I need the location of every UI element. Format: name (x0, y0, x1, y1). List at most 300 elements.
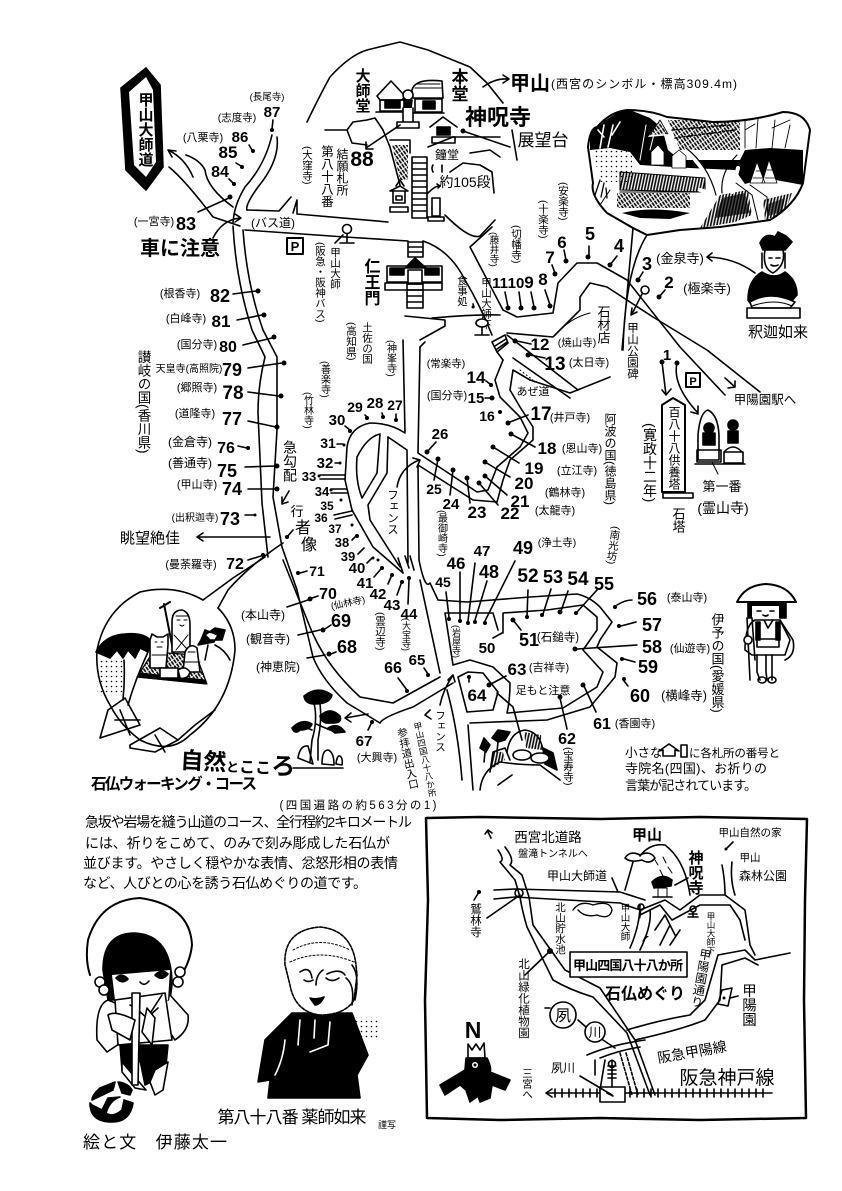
label 甲陽園駅へ: 甲陽園駅へ (734, 393, 796, 407)
stop 88: 第八十八番 (319, 144, 333, 208)
stop 26 (424, 426, 448, 454)
staff (132, 993, 140, 1085)
stop 61: (香園寺) (615, 717, 655, 730)
robe (748, 272, 797, 303)
robe (258, 1013, 368, 1098)
label 甲山公園碑: 甲山公園碑 (626, 322, 639, 380)
stop 6: (安楽寺) (557, 182, 569, 220)
inset map: 夙川 (551, 1061, 575, 1075)
label 第一番 霊山寺: (霊山寺) (697, 500, 749, 516)
stop 72: (曼荼羅寺) (165, 558, 217, 571)
stop 21: (鶴林寺) (545, 485, 585, 499)
label 約105段 (428, 174, 491, 193)
stop 2 (656, 273, 731, 300)
label フェンス with arrow: フェンス (386, 489, 398, 535)
pilgrim character (87, 898, 192, 1095)
label 石塔: 石塔 (670, 507, 686, 533)
statues: 第一番 (695, 410, 745, 474)
stop 63 (486, 660, 569, 688)
stop 74 (177, 478, 280, 499)
stop 27 (387, 397, 403, 422)
stop 80 (177, 334, 276, 356)
stop 76 (168, 435, 250, 457)
label: 釈迦如来 (748, 324, 808, 341)
stop 21 (482, 474, 585, 511)
stop 48 (473, 562, 499, 624)
stop 33: 33 (302, 469, 316, 484)
region label 土佐の国: (高知県) (345, 322, 357, 360)
stop 55: 55 (594, 574, 614, 594)
region label 伊予の国: 伊予の国(愛媛県) (710, 613, 724, 713)
north arrow crow (440, 1017, 510, 1102)
stop 59 (620, 657, 658, 677)
stop 26: 26 (432, 426, 448, 443)
stone stairs (412, 157, 427, 218)
stop 29 (347, 399, 369, 420)
label 最御崎寺: (最御崎寺) (436, 510, 448, 557)
label 眺望絶佳: 眺望絶佳 (120, 530, 180, 547)
stop 2: 2 (664, 273, 674, 292)
stop 75: 75 (217, 461, 237, 481)
label 甲山大師 bus stop and 阪急阪神バス (314, 224, 354, 322)
label 行者像 (285, 504, 317, 554)
building: 仁王門: 仁王門 (362, 258, 380, 306)
stop 18: 18 (538, 439, 556, 458)
stop 83: (一宮寺) (134, 215, 174, 228)
stop 19 (490, 444, 597, 478)
inset map: 北山緑化植物園 (517, 958, 530, 1039)
stop 3: (金泉寺) (656, 251, 704, 266)
label 甲山: 甲山 (510, 72, 550, 95)
title: 自然 (180, 747, 227, 775)
stop 58 (572, 637, 710, 657)
head (285, 927, 357, 1015)
Shaka Nyorai statue (707, 232, 808, 341)
arrow to 金泉寺 (707, 253, 755, 273)
stop 3 (636, 251, 704, 282)
stop 17 (506, 404, 590, 426)
stele (428, 198, 444, 221)
stop 31 (320, 435, 346, 451)
stop 66: 66 (384, 660, 402, 677)
stop 23: 23 (468, 503, 486, 522)
stop 32 (317, 455, 342, 472)
stop 10: (切幡寺) (510, 225, 522, 264)
stop 75 (168, 455, 280, 481)
stop 39: 39 (341, 549, 355, 564)
stop 69: 69 (331, 611, 351, 631)
inset map: 甲陽園通り (689, 947, 713, 1009)
building: 大師堂 (354, 67, 406, 113)
stop 20 (482, 460, 533, 493)
stop 68: 68 (337, 637, 357, 657)
stop 50 (479, 633, 502, 657)
stop 80: 80 (219, 339, 237, 356)
stop 57: 57 (642, 615, 662, 635)
stop 60: 60 (630, 686, 650, 706)
label フェンス with arrow (386, 458, 420, 535)
stop 6: 6 (557, 233, 567, 252)
label 石材店 (555, 305, 610, 344)
stop 12 (512, 335, 596, 354)
label 甲陽園駅へ (725, 378, 796, 407)
stop 68 (256, 637, 357, 674)
stop 54 (558, 569, 589, 614)
stop 27: 27 (387, 397, 403, 413)
stop 82: 82 (210, 286, 230, 306)
stop 30 (329, 412, 352, 433)
label 行者像: 像 (301, 536, 317, 554)
inset map (425, 817, 807, 1120)
stop 79: 79 (222, 360, 242, 380)
stop 35 (320, 498, 342, 513)
stop 40 (349, 556, 380, 577)
stop 74: (甲山寺) (177, 478, 217, 491)
stop 11: 11 (492, 275, 508, 292)
building: 大師堂: 大師堂 (354, 67, 370, 113)
stop 88: 結願札所 (335, 148, 349, 196)
label 甲山大師下 bus stop: 甲山大師下 (480, 277, 492, 330)
label 行者像: 行 (290, 504, 304, 519)
Stop 1 and stone tower (603, 347, 796, 533)
stop 77 (175, 406, 280, 430)
label 石材店: 石材店 (596, 305, 610, 344)
stop 39 (341, 548, 364, 564)
label 行者像: 者 (295, 519, 311, 537)
stop 37: 37 (328, 522, 342, 536)
stop 40: 40 (349, 560, 365, 577)
Tosa province stops 27 to 40 (302, 321, 420, 623)
stop 53 (540, 567, 563, 617)
stop 6 (557, 182, 569, 264)
stop 76: 76 (217, 440, 235, 457)
stop 87 (250, 92, 284, 132)
stop 9 (524, 273, 536, 310)
stop 63: (吉祥寺) (529, 660, 569, 674)
stop 8 (538, 270, 552, 308)
label 車に注意: 車に注意 (140, 237, 220, 260)
stop 20: 20 (515, 474, 533, 493)
inset map: 甲山 (740, 852, 760, 864)
label 急勾配 (282, 440, 298, 504)
stop 49: 49 (513, 538, 533, 558)
inset map: 鷲林寺 (469, 902, 482, 938)
bell tower: 鐘堂 (430, 117, 517, 162)
stop 61 (580, 682, 655, 733)
stop 49: (浄土寺) (538, 536, 576, 549)
stop 70 (241, 586, 337, 622)
stop 88 (301, 125, 400, 208)
stop 5 (585, 224, 595, 260)
label バス道: (バス道) (251, 216, 295, 230)
stop 74: 74 (222, 479, 242, 499)
stop 61: 61 (593, 716, 611, 733)
stop 46: 46 (447, 554, 465, 573)
publisher logo (90, 1082, 133, 1122)
mountain 甲山 (625, 845, 704, 897)
caption: 第八十八番 薬師如来: 第八十八番 薬師如来 (218, 1108, 366, 1127)
stop 24: 24 (443, 496, 460, 513)
credit: 絵と文 伊藤太一 (83, 1133, 227, 1152)
label 展望台: 展望台 (518, 131, 568, 150)
hat (87, 898, 192, 985)
building: 本堂: 本堂 (448, 68, 468, 102)
inset map: 阪急神戸線 (679, 1067, 775, 1089)
stop 44 (401, 576, 418, 623)
stop 83 (134, 194, 232, 234)
note about small shrines (625, 744, 780, 793)
hair (103, 933, 172, 1000)
stop 52: 52 (517, 566, 539, 587)
stop 17: (井戸寺) (550, 410, 590, 424)
stop 51 (510, 618, 579, 650)
label 神呪寺: 神呪寺 (465, 105, 531, 130)
stop 68: (神恵院) (256, 659, 300, 674)
stop 15 (427, 389, 494, 407)
stop 13: 13 (544, 354, 566, 375)
stop 67 (345, 713, 397, 764)
stop 66 (384, 660, 409, 693)
subtitle: 四国遍路の約563分の1: (四国遍路の約563分の1) (280, 798, 437, 812)
stops 72 to 87 left side (120, 92, 317, 573)
stop 10: 10 (508, 275, 524, 292)
mountain outline (307, 42, 503, 122)
boulder illustration (480, 730, 560, 790)
pilgrim figure (737, 584, 796, 683)
railway (546, 1053, 772, 1102)
stop 45 (435, 574, 451, 621)
stop 13: (太日寺) (569, 356, 609, 369)
stop 77: 77 (222, 409, 242, 429)
label 急勾配: 急勾配 (282, 440, 298, 482)
label フェンス (425, 675, 455, 752)
label 甲山: (西宮のシンボル・標高309.4m) (551, 76, 737, 91)
stop 87: (長尾寺) (250, 92, 284, 103)
stop 33 (302, 469, 345, 484)
label 雲辺寺: (雲辺寺) (374, 612, 386, 650)
sign: 甲山大師道 (121, 68, 163, 190)
stop 41 (357, 566, 384, 592)
stop 75: (善通寺) (168, 455, 212, 470)
text block: course description: 並びます。やさしく穏やかな表情、忿怒形相の表情 (83, 855, 398, 871)
inset map: 阪急甲陽線 (656, 1038, 728, 1066)
stop 5: 5 (585, 224, 595, 244)
stop 18: (恩山寺) (562, 442, 602, 455)
stone tower: 百八十八供養塔 (662, 398, 693, 498)
text labels: 西宮北道路 (514, 830, 582, 845)
label 甲山四国八十八か所 参拝道出入口 (395, 721, 438, 803)
stop 7: 7 (545, 248, 555, 267)
stop 58: 58 (642, 637, 662, 657)
stop 45: 45 (435, 574, 451, 590)
stop 46 (447, 554, 465, 623)
inset map: 甲山 (632, 827, 662, 844)
stop 81 (166, 311, 266, 331)
stop 72 (165, 553, 265, 573)
stop 82 (160, 286, 260, 306)
stop 82: (根香寺) (160, 287, 200, 300)
stop 4: 4 (614, 236, 624, 256)
stop 78: (郷照寺) (177, 380, 217, 394)
head and cap (760, 232, 792, 250)
stop 77: (道隆寺) (175, 406, 215, 420)
stop 34: 34 (315, 484, 330, 499)
label 約105段: 約105段 (439, 174, 491, 190)
stop 67: 67 (356, 733, 372, 750)
stop 34 (315, 484, 347, 499)
center title box: 甲山四国八十八か所 (573, 958, 683, 973)
building 甲陽園: 甲陽園 (740, 983, 756, 1027)
stop 19: 19 (525, 459, 543, 478)
inset map: 石仏めぐり (605, 985, 685, 1003)
stop 51: 51 (519, 630, 539, 650)
stop 11 (488, 232, 510, 310)
label 甲山大師 bus stop and 阪急阪神バス: (阪急・阪神バス) (314, 242, 326, 322)
stop 86: 86 (232, 129, 248, 146)
stop 37 (328, 522, 354, 536)
text block: course description: 急坂や岩場を縫う山道のコース、全行程約2キロメートル (85, 814, 412, 830)
building: 仁王門 (362, 242, 442, 308)
stop 85 (219, 143, 244, 169)
label 第一番 霊山寺: 第一番 (702, 479, 742, 494)
stop 86 (218, 111, 256, 153)
label 眺望絶佳 (120, 530, 270, 547)
label 食事処: 食事処 (456, 275, 468, 307)
stop 16 (479, 408, 502, 424)
roads (498, 850, 650, 1095)
stop 56: 56 (637, 589, 657, 609)
stop 60 (622, 677, 707, 706)
stop 47: 47 (474, 543, 490, 560)
parking icon: P (291, 239, 300, 254)
stop 71 (296, 563, 325, 579)
stop 12: 12 (531, 335, 549, 354)
stop 54: 54 (567, 569, 589, 590)
circle illustration: 行者 statues (96, 589, 235, 752)
road network: main course (168, 135, 760, 790)
stop 38 (335, 534, 359, 550)
stop 21: 21 (511, 492, 529, 511)
label 八栗寺: (八栗寺) (183, 131, 223, 144)
stop 71: 71 (309, 563, 325, 579)
bell tower: 鐘堂: 鐘堂 (435, 148, 459, 162)
sign: 甲山大師道: 甲山大師道 (136, 92, 154, 167)
panel: top right forest illustration (588, 108, 810, 235)
stop 67: (大興寺) (357, 750, 397, 764)
parking icon (287, 238, 303, 254)
map frame (425, 817, 807, 1120)
label 甲山公園碑 (626, 286, 649, 380)
stop 42: 42 (370, 586, 386, 603)
inset map: 森林公園 (739, 868, 787, 883)
building: 本堂 (412, 68, 468, 113)
label 足もと注意: 足もと注意 (516, 684, 570, 697)
stop 83: 83 (176, 214, 196, 234)
label 神峯寺: (神峯寺) (384, 340, 396, 377)
inset map: 甲山大師道 (547, 869, 607, 883)
stop 62: 62 (558, 731, 576, 748)
note about small shrines: に各札所の番号と (689, 746, 780, 760)
stop 31: 31 (320, 435, 336, 451)
stop 17: 17 (530, 404, 552, 425)
label あぜ道 (516, 370, 550, 398)
note about small shrines: 言葉が記されています。 (625, 778, 757, 793)
stop 55 (574, 574, 614, 615)
label 南光坊: (南光坊) (604, 525, 622, 565)
stop 49 (483, 536, 576, 625)
inset map: 甲山自然の家 (718, 826, 782, 839)
region label 讃岐の国: 讃岐の国(香川県) (136, 350, 151, 454)
stop 65: 65 (409, 652, 425, 669)
stop 11: (藤井寺) (488, 232, 499, 267)
stop 72: 72 (226, 556, 244, 573)
stop 88: (大窪寺) (301, 146, 313, 184)
stop 41: 41 (357, 575, 373, 592)
title: こころ (239, 753, 296, 781)
stop 42 (370, 573, 394, 603)
stop 65 (409, 652, 430, 677)
stop 78: 78 (222, 383, 244, 404)
label 甲山四国八十八か所 参拝道出入口: 甲山四国八十八か所 (412, 721, 438, 799)
stop 10 (508, 225, 524, 310)
stop 7: (十楽寺) (537, 200, 549, 238)
stop 78 (177, 380, 284, 404)
temple group on mountain: 神呪寺 (301, 42, 737, 221)
label 寛政十二年: (寛政十二年) (642, 423, 658, 502)
stop 25: 25 (426, 481, 442, 497)
stop 84 (211, 164, 236, 186)
label 仙林寺: (仙林寺) (330, 594, 366, 612)
pedestal (747, 308, 800, 318)
body (97, 995, 188, 1052)
stop 28: 28 (367, 395, 383, 412)
label 大宝寺: (大宝寺) (401, 618, 411, 651)
text block: course description: など、人びとの心を誘う石仏めぐりの道です。 (83, 875, 367, 891)
inset map: 三宮へ (521, 1068, 533, 1100)
stop 36 (314, 511, 352, 525)
label 甲山四国八十八か所 参拝道出入口: 参拝道出入口 (395, 726, 420, 790)
stop 22: (太龍寺) (535, 503, 575, 517)
caption: 第八十八番 薬師如来: 謹写 (378, 1119, 396, 1130)
stop 2: (極楽寺) (683, 281, 731, 296)
region label 土佐の国: 土佐の国 (361, 321, 373, 365)
stop 29: 29 (347, 399, 363, 415)
station 夙 circle: 夙 (555, 1008, 571, 1025)
stop 88: 88 (350, 148, 374, 171)
label 善楽寺: (善楽寺) (318, 361, 330, 398)
stop 44: 44 (401, 606, 418, 623)
stops 14 to 26 (424, 357, 602, 557)
parking icon: P (689, 376, 697, 388)
stop 43: 43 (384, 597, 400, 614)
stop 23 (464, 476, 486, 522)
stop 86: (志度寺) (218, 111, 256, 124)
stop 81: 81 (212, 312, 230, 331)
stops 1 to 13 (488, 182, 731, 375)
stop 62 (558, 694, 576, 786)
stop 8: 8 (538, 270, 548, 289)
stop 81: (白峰寺) (166, 311, 206, 325)
north arrow crow: N (465, 1017, 481, 1043)
mountain 甲山: 神呪寺 (686, 850, 704, 895)
text block: course description: には、祈りをこめて、のみで刻み彫成した石仏が (85, 835, 390, 851)
stop 52 (517, 566, 539, 619)
stop 73: 73 (220, 509, 240, 529)
station 川 circle (585, 1022, 605, 1042)
label 甲山大師下 bus stop (475, 277, 492, 335)
stop 15: (国分寺) (427, 389, 467, 402)
title: 石仏ウォーキング・コース (91, 774, 257, 793)
